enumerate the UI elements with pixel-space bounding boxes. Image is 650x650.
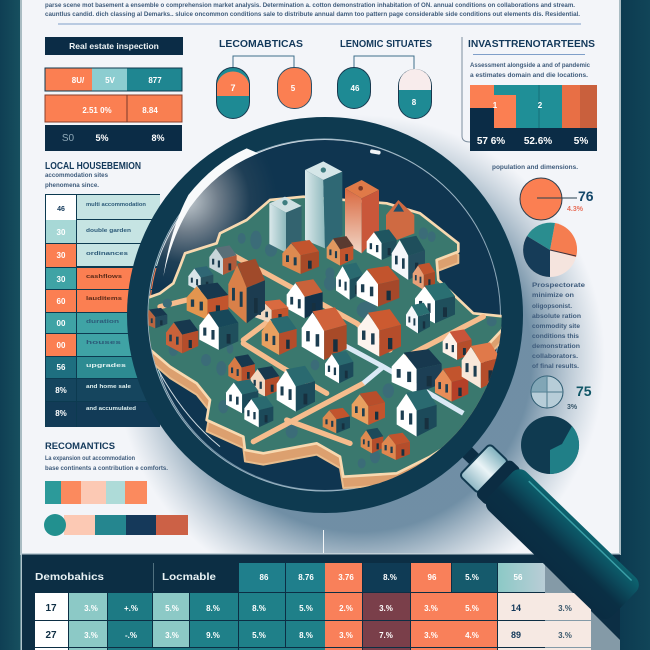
blocks chart	[470, 85, 597, 128]
panel: locomatics	[216, 39, 312, 118]
row 1: 46	[57, 206, 65, 213]
percent 4.3: 4.3%	[567, 206, 584, 213]
partial next row	[35, 648, 591, 650]
row 1: multi accommodation	[86, 202, 146, 208]
row 5: 60	[57, 297, 66, 306]
bracket line	[462, 37, 470, 142]
row 1	[46, 195, 160, 220]
row 2: 30	[57, 228, 66, 237]
panel: investment patterns	[462, 37, 597, 151]
description: commodity site	[532, 323, 580, 330]
map plate top	[142, 197, 506, 477]
tower orange	[345, 180, 379, 253]
stacked bar row 1	[45, 68, 182, 91]
header row	[239, 563, 545, 592]
magnifying glass	[138, 128, 643, 623]
label: locomable: Locmable	[162, 572, 216, 583]
description	[532, 282, 585, 370]
heading bar: Real estate inspection	[69, 41, 159, 51]
heading rule	[473, 54, 585, 55]
row 7	[46, 334, 160, 356]
dark collar band	[475, 458, 522, 507]
trees	[163, 227, 497, 468]
intro text block	[45, 2, 580, 18]
table row 17	[35, 593, 591, 620]
stacked bar row 1: 5V	[105, 76, 116, 85]
table row 27: 9.%	[206, 631, 220, 640]
stacked bar row 1: 877	[148, 76, 162, 85]
tower pale	[269, 197, 302, 253]
row 10	[46, 402, 160, 427]
row 2	[46, 220, 160, 243]
table row 27: 3.%	[558, 631, 572, 640]
table row 17: 3.%	[84, 604, 98, 613]
stem	[457, 442, 487, 471]
canal	[343, 345, 463, 413]
header row: 56	[514, 573, 523, 582]
row 7: 00	[57, 341, 66, 350]
table row 27	[35, 621, 591, 647]
blocks chart: 1	[493, 101, 498, 110]
row 3: 30	[57, 251, 66, 260]
description: a estimates domain and die locations.	[470, 72, 588, 79]
stacked bar row 2: 8.84	[142, 106, 158, 115]
values bar: 52.6%	[524, 136, 552, 147]
grip highlight	[529, 481, 632, 581]
table row 17: 3.%	[379, 604, 393, 613]
header row: 96	[428, 573, 437, 582]
row 6	[46, 313, 160, 333]
small highlight dash	[370, 149, 381, 155]
left margin band	[0, 0, 21, 650]
swatch row 1	[45, 481, 147, 504]
table row 17: 5.%	[165, 604, 179, 613]
swatch row 2	[44, 514, 188, 536]
header row: 3.76	[338, 573, 354, 582]
table row 27: 4.%	[465, 631, 479, 640]
handle	[443, 428, 643, 623]
stacked bar row 3: 5%	[95, 133, 109, 143]
table row 27: 3.%	[84, 631, 98, 640]
capsule 8: 8	[412, 98, 417, 107]
row 4: 30	[57, 275, 66, 284]
stacked bar row 2: 2.51 0%	[82, 106, 112, 115]
fading corner	[545, 565, 620, 650]
value 75: 75	[576, 383, 592, 399]
map plate side	[148, 253, 502, 489]
table row 27: 3.%	[339, 631, 353, 640]
row 10: and accumulated	[86, 406, 136, 412]
lens shadow on paper	[131, 121, 599, 553]
donut pie	[521, 416, 579, 474]
row 7: houses	[86, 340, 121, 346]
table row 27: 7.%	[379, 631, 393, 640]
row 2: double garden	[86, 228, 131, 234]
header row: 86	[260, 573, 269, 582]
table row 27: 8.%	[299, 631, 313, 640]
stacked bar row 2	[45, 95, 182, 122]
table row 17: +.%	[124, 604, 138, 613]
percent 3: 3%	[567, 404, 578, 411]
table row 27: 89	[511, 630, 521, 640]
description: accommodation sites	[45, 172, 108, 179]
description: base continents a contribution e comforts.	[45, 465, 168, 472]
tower tall	[305, 161, 342, 248]
glass	[150, 140, 500, 490]
grip	[482, 465, 643, 623]
heading: LECOMABTICAS	[219, 39, 303, 50]
heading: LOCAL HOUSEBEMION	[45, 161, 141, 172]
table row 17: 3.%	[424, 604, 438, 613]
description: minimize on	[532, 292, 574, 299]
stacked bar row 3: 8%	[151, 133, 165, 143]
blocks chart: 2	[538, 101, 543, 110]
base vertical divider	[323, 530, 324, 553]
heading: INVASTTRENOTARTEENS	[468, 39, 595, 50]
pie chart	[523, 223, 577, 277]
values bar: 57 6%	[477, 136, 505, 147]
header divider	[153, 563, 154, 591]
table row 17: 5.%	[299, 604, 313, 613]
description	[45, 455, 168, 472]
row 5: lauditems	[86, 296, 122, 302]
description: Prospectorate	[532, 282, 585, 289]
row 8: upgrades	[86, 363, 126, 369]
table row 27: 27	[45, 630, 57, 641]
header row: 8.%	[383, 573, 397, 582]
panel: recommendations	[44, 441, 188, 536]
heading: LENOMIC SITUATES	[340, 39, 432, 50]
row 4	[46, 268, 160, 289]
header divider	[58, 24, 581, 25]
row 3	[46, 244, 160, 267]
inner ring line	[148, 139, 500, 491]
description: oligopsonist.	[532, 303, 572, 310]
description: phenomena since.	[45, 182, 99, 189]
row 9: 8%	[55, 386, 67, 395]
caption: population and dimensions.	[492, 164, 578, 171]
lens contents	[142, 140, 506, 490]
table row 17: 8.%	[252, 604, 266, 613]
capsule 7: 7	[230, 83, 236, 93]
table row 17: 2.%	[339, 604, 353, 613]
panel: bottom table	[20, 553, 620, 650]
dial gauge	[531, 376, 563, 408]
housing table	[45, 194, 160, 427]
header row: 5.%	[465, 573, 479, 582]
table row 27: 5.%	[252, 631, 266, 640]
description: Assessment alongside a and of pandemic	[470, 62, 590, 69]
panel: right statistics	[492, 164, 594, 474]
silver collar	[459, 444, 509, 493]
description: demonstration	[532, 343, 580, 350]
row 6: 00	[57, 319, 66, 328]
row 6: duration	[86, 319, 119, 325]
table row 17: 5.%	[465, 604, 479, 613]
connector	[233, 56, 294, 70]
description: collaborators.	[532, 353, 578, 360]
dome tower	[386, 200, 414, 240]
description: of final results.	[532, 363, 579, 370]
description	[45, 172, 108, 189]
right margin band	[620, 0, 650, 650]
description: absolute ration	[532, 313, 581, 320]
values bar	[470, 128, 597, 151]
table row 27: 3.%	[165, 631, 179, 640]
row 8: 56	[57, 363, 66, 372]
table row 27: 3.%	[424, 631, 438, 640]
panel: real estate inspection	[45, 37, 183, 151]
description	[470, 62, 590, 79]
capsule 5: 5	[291, 84, 296, 93]
table row 17: 3.%	[558, 604, 572, 613]
lower highlight arc	[158, 370, 220, 447]
table row 27: -.%	[125, 631, 137, 640]
paper sheet	[21, 0, 620, 554]
stacked bar row 1: 8U/	[72, 76, 85, 85]
roads	[160, 252, 483, 443]
table row 17: 17	[45, 603, 57, 614]
table row 17: 8.%	[206, 604, 220, 613]
values bar: 5%	[574, 136, 588, 147]
row 3: ordinances	[86, 251, 128, 257]
intro text block: cauntlus candid. dich classing al Demarks.. sluice oncommon conditions sale to distribute annual damn too pattern page considerable side conditions out elements dis. Residential.	[45, 11, 580, 18]
description: La expansion out accommodation	[45, 455, 135, 462]
panel: local housing	[45, 161, 160, 427]
label: demographics: Demobahics	[35, 572, 105, 583]
capsule 46: 46	[351, 84, 360, 93]
outer ring	[138, 128, 512, 502]
description: conditions this	[532, 333, 579, 340]
row 8	[46, 357, 160, 378]
table row 17: 14	[511, 603, 521, 613]
value 76: 76	[578, 188, 594, 204]
connector	[354, 56, 414, 70]
stacked bar row 3	[45, 125, 182, 151]
row 9: and home sale	[86, 384, 131, 390]
panel: economic situates	[338, 39, 432, 118]
row 4: cashflows	[86, 274, 122, 280]
lens highlight crescent	[163, 148, 258, 277]
header row: 8.76	[298, 573, 314, 582]
row 10: 8%	[55, 409, 67, 418]
stacked bar row 3: S0	[62, 133, 75, 144]
houses	[143, 229, 500, 460]
row 5	[46, 290, 160, 312]
intro text block: parse scene mot basement a ensemble o comprehension market analysis. Determination a. cotton demonstration inhabitation of ON. annual conditions on collaborations and stream.	[45, 2, 575, 9]
heading: RECOMANTICS	[45, 441, 115, 451]
orange circle	[520, 178, 577, 220]
row 9	[46, 379, 160, 401]
